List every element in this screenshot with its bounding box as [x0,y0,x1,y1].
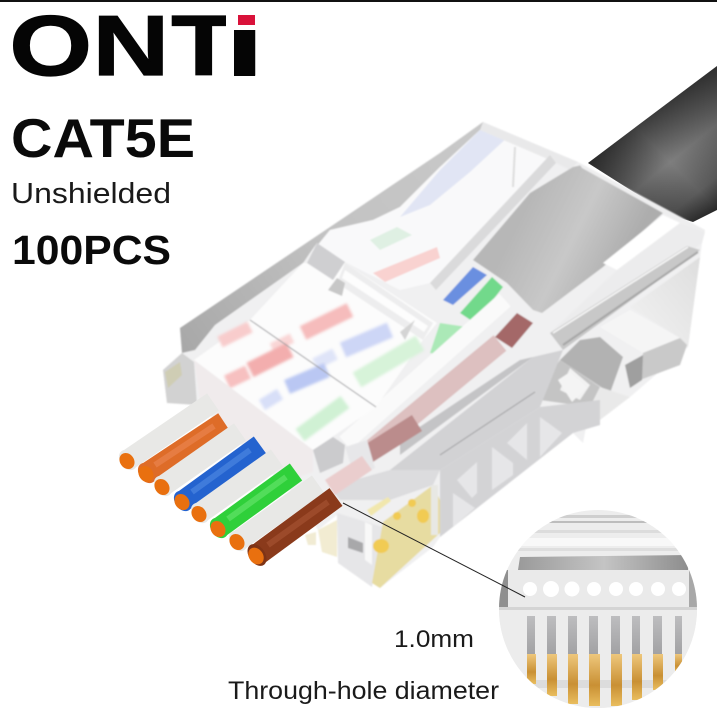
label: Through-hole diameter: Through-hole diameter [228,677,499,705]
connector body silhouette [163,122,705,588]
front seam [250,320,376,407]
upper latch interior [303,127,550,290]
wire: orange [134,422,224,487]
contact pins [527,616,682,706]
side panel [390,350,563,470]
wire: white 2 [150,432,240,500]
heading: CAT5E: CAT5E [11,107,195,169]
circular inset: contact detail [499,510,698,709]
rear opening [630,257,700,347]
logo: ONTi: ONTi [9,0,262,94]
label: 1.0mm: 1.0mm [394,626,474,653]
wire: blue [170,445,260,515]
left nub [163,353,197,405]
side fins with windows [440,372,600,537]
network cable [588,66,717,222]
front lower clear block [305,513,383,587]
faded wire stripes under the plate [220,310,420,435]
RJ45 connector [163,122,705,588]
wire: white 3 [187,458,277,527]
text: 100PCS: 100PCS [12,227,171,273]
front right corner [313,437,440,500]
inner colored wires [345,267,533,457]
wire: green [206,472,296,542]
rear floor and latch blocks [540,310,687,420]
gold contact tint [367,485,440,588]
wire: white 4 [225,484,318,555]
front plate [194,263,437,450]
through holes [523,581,686,597]
side rail [550,246,700,350]
top black border [0,0,717,2]
inner grey sleeve [473,165,663,313]
top edge band [180,122,487,353]
text: Unshielded: Unshielded [11,178,171,210]
through-hole plate [499,570,698,607]
wire: white 1 [115,402,213,474]
leader line [343,503,525,597]
wire: brown [244,497,336,569]
front face [194,360,313,480]
cross bar [307,243,433,340]
metal band [518,555,690,570]
